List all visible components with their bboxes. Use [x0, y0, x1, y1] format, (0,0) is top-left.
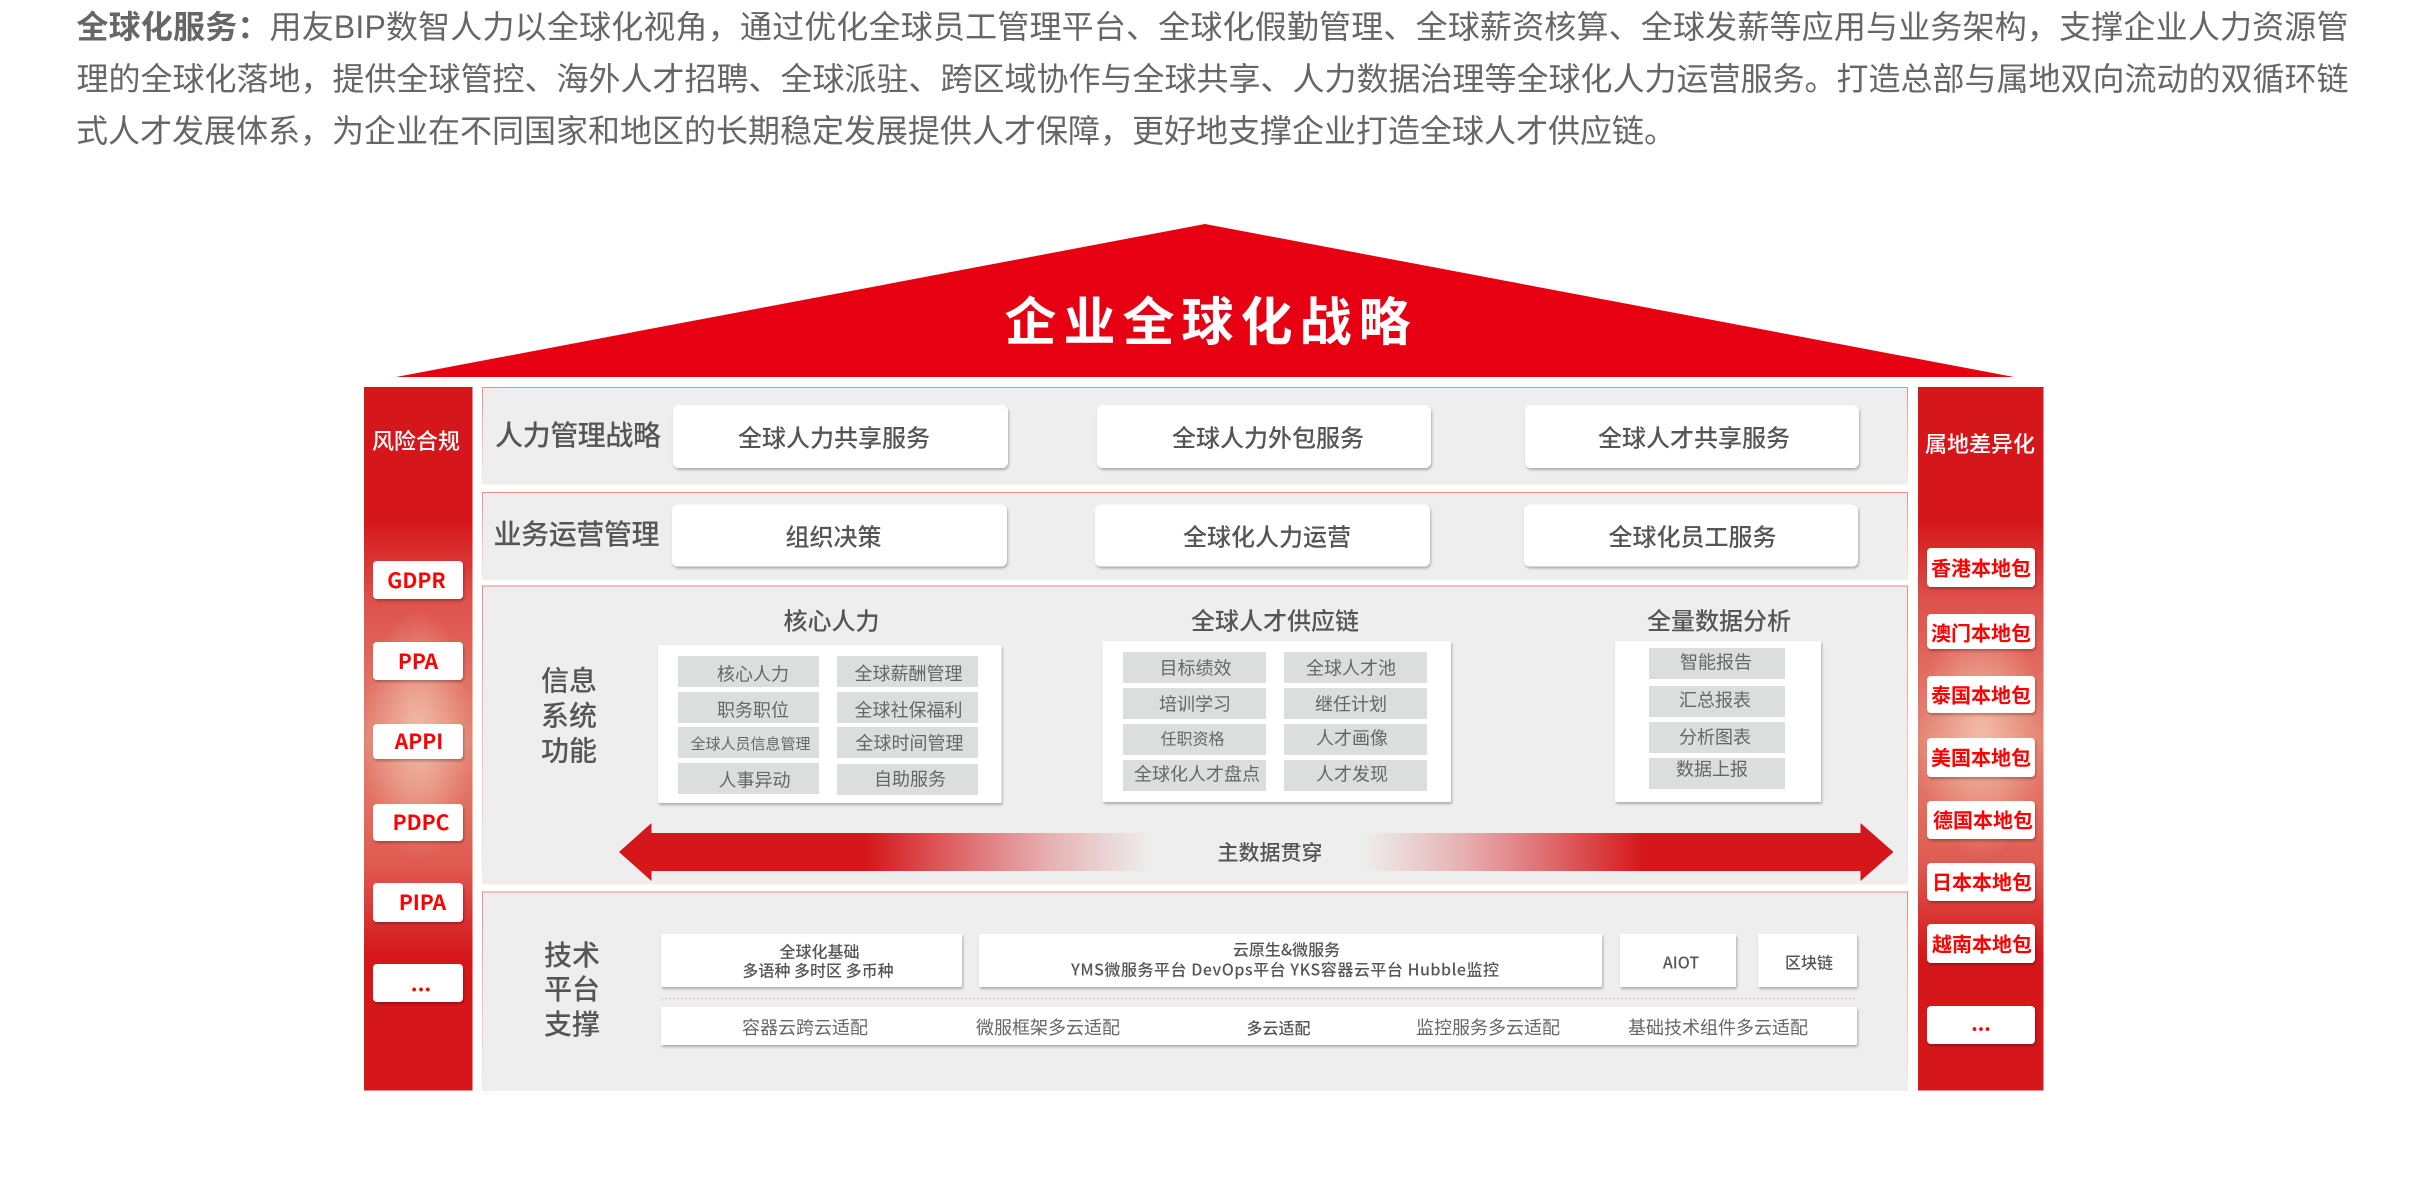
roof triangle	[396, 224, 2014, 377]
panel background	[482, 586, 1908, 884]
card: global talent sharing: 全球人才共享服务	[1598, 418, 1790, 454]
chip: APPI: APPI	[394, 726, 443, 756]
chip: more	[1927, 1006, 2035, 1044]
panel heading: 系统	[541, 694, 597, 734]
chip: more: ...	[1971, 1008, 1991, 1036]
cell: 全球化人才盘点	[1134, 760, 1260, 786]
group heading: 全量数据分析	[1647, 602, 1791, 636]
cell: 人才发现	[1316, 760, 1388, 786]
group: full data analysis	[1615, 602, 1821, 802]
chip: GDPR: GDPR	[387, 565, 446, 595]
cell	[1123, 688, 1266, 719]
chip: Vietnam	[1927, 924, 2035, 963]
cell: 目标绩效	[1160, 654, 1232, 680]
chip: Hong Kong: 香港本地包	[1931, 552, 2031, 582]
panel heading: 功能	[541, 730, 597, 770]
panel heading	[544, 934, 600, 1043]
cell: 核心人力	[717, 660, 789, 686]
panel background	[482, 388, 1908, 484]
chip: Thailand: 泰国本地包	[1931, 680, 2031, 708]
cell: 全球社保福利	[854, 696, 962, 722]
group heading: 全球人才供应链	[1191, 602, 1359, 636]
intro line 1: 全球化服务：用友BIP数智人力以全球化视角，通过优化全球员工管理平台、全球化假勤管理、全球薪资核算、全球发薪等应用与业务架构，支撑企业人力资源管	[76, 9, 2348, 45]
cell	[837, 764, 978, 795]
card: global HR shared services	[673, 405, 1008, 468]
group: global talent supply chain	[1102, 602, 1451, 802]
chip: Macau: 澳门本地包	[1931, 618, 2031, 646]
card: cloud native and microservices: 云原生&微服务	[1233, 936, 1340, 960]
intro line 2: 理的全球化落地，提供全球管控、海外人才招聘、全球派驻、跨区域协作与全球共享、人力数据治理等全球化人力运营服务。打造总部与属地双向流动的双循环链	[76, 61, 2348, 97]
pillar heading: 属地差异化	[1925, 427, 2035, 459]
card: cloud native and microservices: YMS微服务平台 DevOps平台 YKS容器云平台 Hubble监控	[1070, 956, 1499, 980]
chip: Germany: 德国本地包	[1933, 804, 2033, 834]
cell: 全球人员信息管理	[690, 733, 811, 754]
multi-cloud adaptation bar: 基础技术组件多云适配	[1628, 1014, 1808, 1040]
panel background	[482, 892, 1908, 1090]
cell: 人事异动	[718, 766, 790, 792]
panel: information system functions	[482, 586, 1908, 884]
roof: enterprise globalization strategy	[396, 224, 2014, 377]
cell: 人才画像	[1316, 724, 1388, 750]
card: AIOT	[1620, 934, 1736, 987]
pillar glow	[364, 610, 472, 860]
cell: 任职资格	[1160, 726, 1225, 750]
white container	[1615, 641, 1821, 802]
chip: USA: 美国本地包	[1931, 742, 2031, 771]
cell	[1123, 724, 1266, 755]
card: blockchain: 区块链	[1785, 950, 1833, 974]
roof title: 企业全球化战略	[1004, 280, 1410, 356]
left pillar: risk compliance	[364, 387, 472, 1090]
chip: PIPA: PIPA	[399, 887, 447, 917]
chip: Hong Kong	[1927, 548, 2035, 587]
card: organization decisions: 组织决策	[786, 518, 882, 552]
panel: business operations management	[482, 492, 1908, 580]
right pillar: local differentiation	[1918, 387, 2044, 1090]
card: global talent sharing	[1525, 405, 1859, 468]
panel: HR management strategy	[482, 388, 1908, 484]
intro line 3: 式人才发展体系，为企业在不同国家和地区的长期稳定发展提供人才保障，更好地支撑企业打造全球人才供应链。	[76, 113, 1676, 149]
cell	[837, 727, 978, 758]
chip: Japan: 日本本地包	[1932, 866, 2032, 896]
multi-cloud adaptation bar: 容器云跨云适配	[742, 1014, 868, 1040]
cell: 自助服务	[874, 766, 946, 792]
panel heading: 人力管理战略	[495, 414, 661, 454]
card: global HR operations: 全球化人力运营	[1183, 518, 1351, 552]
chip: more: ...	[411, 968, 431, 998]
pillar glow	[1918, 610, 2044, 860]
arrow label: 主数据贯穿	[1218, 837, 1322, 867]
cell	[1284, 688, 1427, 719]
cell	[1649, 722, 1785, 753]
chip: PPA: PPA	[398, 646, 439, 676]
panel background	[482, 492, 1908, 580]
cell	[837, 692, 978, 723]
cell	[678, 656, 819, 687]
multi-cloud adaptation bar: 多云适配	[1246, 1015, 1311, 1039]
card: global employee services: 全球化员工服务	[1608, 518, 1776, 552]
group: core HR	[658, 602, 1002, 803]
cell	[678, 727, 819, 758]
card: blockchain	[1758, 934, 1857, 987]
cell: 职务职位	[717, 696, 789, 722]
panel heading: 信息	[541, 660, 597, 700]
cell: 数据上报	[1676, 756, 1748, 782]
cell: 全球时间管理	[856, 730, 964, 756]
card: global HR shared services: 全球人力共享服务	[738, 418, 930, 454]
chip: Vietnam: 越南本地包	[1932, 928, 2032, 958]
panel: technology platform support	[482, 892, 1908, 1090]
pillar heading: 风险合规	[372, 424, 460, 456]
card: global employee services	[1524, 504, 1858, 566]
cell	[1123, 652, 1266, 683]
cell	[678, 763, 819, 794]
chip: PIPA	[373, 883, 463, 922]
card: global HR outsourcing: 全球人力外包服务	[1172, 418, 1364, 454]
group heading: 核心人力	[784, 602, 880, 636]
cell: 全球人才池	[1306, 654, 1396, 680]
chip: APPI	[373, 724, 463, 759]
panel heading: 技术	[544, 934, 600, 974]
cell: 培训学习	[1159, 690, 1231, 716]
multi-cloud adaptation bar: 监控服务多云适配	[1416, 1014, 1560, 1040]
panel heading: 平台	[544, 968, 600, 1008]
white container	[1102, 641, 1451, 802]
right arrow	[1363, 823, 1894, 881]
chip: PDPC: PDPC	[393, 807, 450, 837]
cell: 智能报告	[1680, 648, 1752, 674]
pillar background	[1918, 387, 2044, 1090]
chip: USA	[1927, 738, 2035, 777]
cell	[1649, 686, 1785, 717]
cell	[837, 656, 978, 687]
chip: PDPC	[373, 804, 463, 841]
multi-cloud adaptation bar: 微服框架多云适配	[976, 1014, 1120, 1040]
cell	[1649, 648, 1785, 679]
panel heading	[541, 660, 597, 770]
white container	[658, 645, 1002, 803]
card: organization decisions	[672, 504, 1007, 566]
cell	[1284, 724, 1427, 755]
cell: 全球薪酬管理	[854, 660, 962, 686]
cell	[678, 692, 819, 723]
pillar background	[364, 387, 472, 1090]
chip: more	[373, 964, 463, 1002]
card: global HR outsourcing	[1097, 405, 1431, 468]
card: cloud native and microservices	[979, 934, 1602, 987]
chip: PPA	[373, 642, 463, 680]
arrow: master data runs through	[619, 823, 1894, 881]
multi-cloud adaptation bar	[661, 1007, 1857, 1045]
cell: 分析图表	[1679, 724, 1751, 750]
chip: GDPR	[373, 561, 463, 599]
cell	[1649, 756, 1785, 789]
left arrow	[619, 823, 1150, 881]
cell: 继任计划	[1315, 690, 1387, 716]
card: global HR operations	[1095, 504, 1430, 566]
cell	[1284, 652, 1427, 683]
panel heading: 支撑	[544, 1003, 600, 1043]
cell	[1284, 760, 1427, 791]
card: globalization foundation	[661, 934, 962, 987]
card: globalization foundation: 多语种 多时区 多币种	[742, 958, 894, 982]
intro text block	[76, 9, 2348, 149]
cell: 汇总报表	[1679, 686, 1751, 712]
card: AIOT: AIOT	[1663, 950, 1699, 974]
panel heading: 业务运营管理	[494, 513, 660, 553]
card: globalization foundation: 全球化基础	[779, 938, 860, 962]
